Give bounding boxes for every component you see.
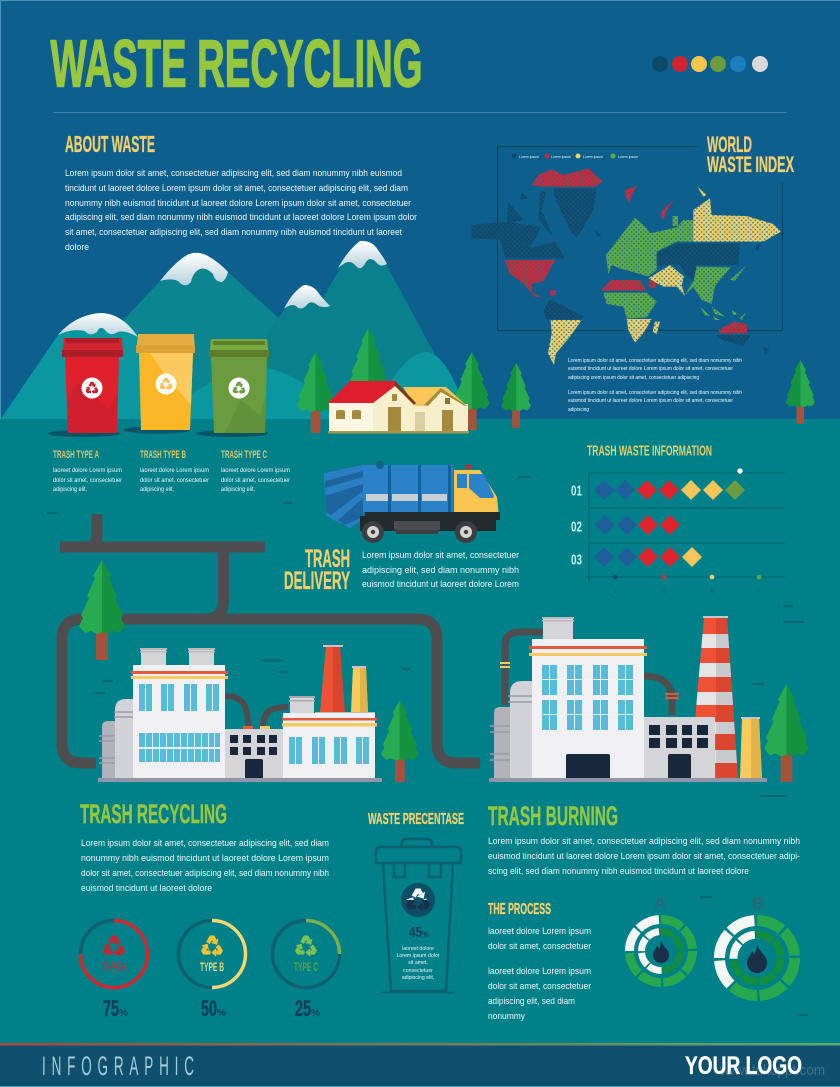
text block: map notes: euismod tincidunt ut laoreet dolore Lorem ipsum dolor sit amet, consectetuer bbox=[568, 366, 733, 372]
bin: waste percentage: 45 bbox=[409, 924, 422, 941]
donut: type A 75%: 75 bbox=[103, 996, 119, 1021]
donut: type A 75%: % bbox=[119, 1008, 128, 1019]
heading: trash delivery bbox=[284, 545, 350, 595]
pipeline bbox=[60, 514, 480, 763]
heading: trash delivery: TRASH bbox=[305, 545, 350, 573]
labels: trash type A: laoreet dolore Lorem ipsum bbox=[53, 467, 122, 474]
text block: map notes: euismod tincidunt ut laoreet dolore Lorem ipsum dolor sit amet, consectetuer bbox=[568, 398, 733, 404]
bin: waste percentage: sit amet, bbox=[408, 960, 428, 966]
text block: the process: laoreet dolore Lorem ipsum bbox=[488, 926, 591, 936]
text block: trash recycling: euismod tincidunt ut laoreet dolore bbox=[81, 883, 212, 893]
map legend: Lorem ipsum bbox=[519, 154, 540, 159]
trees: village bbox=[297, 328, 815, 433]
ring chart B bbox=[704, 894, 810, 1011]
ring chart A: A bbox=[654, 894, 666, 913]
text block: the process: laoreet dolore Lorem ipsum bbox=[488, 966, 591, 976]
bin: trash type A bbox=[48, 338, 123, 437]
labels: trash type A: TRASH TYPE A bbox=[53, 449, 99, 461]
bin: trash type B bbox=[123, 334, 195, 434]
diamond chart: 01 bbox=[571, 482, 582, 500]
heading: trash recycling: TRASH RECYCLING bbox=[80, 799, 227, 829]
text block: the process bbox=[488, 926, 591, 1021]
tree: by pipeline bbox=[79, 560, 125, 660]
text block: trash recycling: dolor sit amet, consectetuer adipiscing elit, sed diam nonummy nibh bbox=[81, 868, 329, 878]
diamond chart: 1 bbox=[613, 589, 617, 595]
text block: the process: adipiscing elit, sed diam bbox=[488, 996, 575, 1006]
text block: the process: dolor sit amet, consectetuer bbox=[488, 941, 591, 951]
text block: trash recycling: Lorem ipsum dolor sit amet, consectetuer adipiscing elit, sed diam bbox=[81, 838, 329, 848]
labels: trash type A: dolor sit amet, consectetuer bbox=[53, 477, 123, 484]
text block: map notes: adipiscing bbox=[568, 407, 589, 413]
world map frame bbox=[498, 146, 782, 330]
bin: waste percentage bbox=[376, 839, 461, 992]
bin: trash type C bbox=[196, 339, 269, 437]
bin: waste percentage: consectetuer bbox=[403, 968, 433, 974]
title: WASTE RECYCLING bbox=[50, 26, 422, 102]
donut: type B 50%: 50 bbox=[201, 996, 217, 1021]
watermark: www.tukuppt.com bbox=[719, 1062, 825, 1079]
text block: trash burning bbox=[488, 836, 800, 876]
labels: trash type C: laoreet dolore Lorem ipsum bbox=[221, 467, 290, 474]
tree: by burning plant bbox=[764, 684, 809, 782]
text block: map notes: Lorem ipsum dolor sit amet, consectetuer adipiscing elit, sed diam nonummy nibh bbox=[568, 390, 742, 396]
ring chart A bbox=[630, 894, 692, 982]
labels: trash type C bbox=[221, 449, 291, 493]
bin: waste percentage: % bbox=[422, 930, 429, 939]
donut: type A 75%: TYPE A bbox=[102, 960, 126, 974]
labels: trash type B bbox=[140, 449, 210, 493]
heading: world waste index bbox=[707, 132, 794, 177]
donut: type C 25%: % bbox=[311, 1008, 320, 1019]
labels: trash type A: adipiscing elit, bbox=[53, 486, 87, 493]
bin: waste percentage: laoreet dolore bbox=[402, 946, 434, 952]
diamond chart: 3 bbox=[662, 589, 666, 595]
dotted world map bbox=[472, 168, 781, 365]
diamond chart bbox=[571, 468, 785, 595]
text block: map notes: adipiscing orem ipsum dolor sit amet, consectetuer adipiscing bbox=[568, 375, 699, 381]
donut: type C 25% bbox=[272, 920, 340, 1021]
donut: type B 50%: % bbox=[217, 1008, 226, 1019]
palette dots bbox=[652, 56, 768, 72]
text block: map notes bbox=[568, 358, 742, 413]
diamond chart: 5 bbox=[710, 589, 714, 595]
text block: map notes: Lorem ipsum dolor sit amet, consectetuer adipiscing elit, sed diam nonummy nibh bbox=[568, 358, 742, 364]
garbage truck bbox=[324, 461, 500, 543]
background: sky panel bbox=[0, 0, 840, 420]
text block: trash burning: scing elit, sed diam nonummy nibh euismod tincidunt ut laoreet dolore bbox=[488, 866, 749, 876]
donut: type C 25%: 25 bbox=[295, 996, 311, 1021]
ring chart B: B bbox=[752, 894, 764, 913]
text block: about waste: dolore bbox=[65, 242, 89, 252]
text block: about waste bbox=[65, 168, 417, 252]
labels: trash type B: dolor sit amet, consectetuer bbox=[140, 477, 210, 484]
labels: trash type B: TRASH TYPE B bbox=[140, 449, 186, 461]
background: ground panel bbox=[0, 419, 840, 1045]
donut: type B 50% bbox=[178, 920, 246, 1021]
text block: trash delivery: Lorem ipsum dolor sit amet, consectetuer bbox=[362, 550, 519, 560]
labels: trash type B: laoreet dolore Lorem ipsum bbox=[140, 467, 209, 474]
diamond chart: 02 bbox=[571, 518, 582, 536]
map legend: Lorem ipsum bbox=[618, 154, 639, 159]
labels: trash type C: TRASH TYPE C bbox=[221, 449, 267, 461]
labels: trash type B: adipiscing elit, bbox=[140, 486, 174, 493]
diamond chart: 7 bbox=[757, 589, 761, 595]
text block: about waste: sit amet, consectetuer adipiscing elit, sed diam nonummy nibh euismod tincidunt ut laoreet bbox=[65, 227, 402, 237]
text block: trash delivery: adipiscing elit, sed diam nonummy nibh bbox=[362, 565, 519, 575]
bin: waste percentage: adipiscing elit, bbox=[402, 975, 434, 981]
text block: trash recycling bbox=[81, 838, 329, 893]
text block: about waste: Lorem ipsum dolor sit amet, consectetuer adipiscing elit, sed diam nonummy nibh euismod bbox=[65, 168, 402, 178]
text block: trash delivery bbox=[362, 550, 519, 589]
text block: trash burning: euismod tincidunt ut laoreet dolore Lorem ipsum dolor sit amet, consectetuer adipi- bbox=[488, 851, 800, 861]
heading: trash waste information: TRASH WASTE INFORMATION bbox=[587, 442, 712, 460]
heading: waste precentase: WASTE PRECENTASE bbox=[368, 811, 464, 828]
bin: waste percentage: Lorem ipsum dolor bbox=[397, 953, 440, 959]
heading: trash burning: TRASH BURNING bbox=[488, 801, 618, 831]
heading: world waste index: WORLD bbox=[707, 132, 752, 157]
text block: the process: nonummy bbox=[488, 1011, 525, 1021]
labels: trash type A bbox=[53, 449, 123, 493]
donut: type C 25%: TYPE C bbox=[294, 960, 318, 974]
heading: the process: THE PROCESS bbox=[488, 901, 551, 918]
text block: trash recycling: nonummy nibh euismod tincidunt ut laoreet dolore Lorem ipsum bbox=[81, 853, 329, 863]
map legend: Lorem ipsum bbox=[551, 154, 572, 159]
text block: about waste: nonummy nibh euismod tincidunt ut laoreet dolore Lorem ipsum dolor sit amet, consectetuer bbox=[65, 198, 411, 208]
logo: YOUR LOGO bbox=[685, 1052, 802, 1080]
factory: burning plant bbox=[489, 616, 767, 782]
diamond chart: 03 bbox=[571, 552, 582, 568]
text block: trash burning: Lorem ipsum dolor sit amet, consectetuer adipiscing elit, sed diam nonummy nibh bbox=[488, 836, 800, 846]
text block: about waste: tincidunt ut laoreet dolore Lorem ipsum dolor sit amet, consectetuer adipiscing elit, sed diam bbox=[65, 183, 408, 193]
labels: trash type C: adipiscing elit, bbox=[221, 486, 255, 493]
text block: the process: dolor sit amet, consectetuer bbox=[488, 981, 591, 991]
footer label: INFOGRAPHIC bbox=[42, 1051, 194, 1081]
heading: about waste: ABOUT WASTE bbox=[65, 131, 155, 157]
mountains bbox=[0, 241, 470, 420]
donut: type A 75% bbox=[80, 920, 148, 1021]
labels: trash type C: dolor sit amet, consectetuer bbox=[221, 477, 291, 484]
tree: by recycling plant bbox=[381, 700, 419, 782]
factory: recycling plant bbox=[98, 645, 382, 782]
text block: trash delivery: euismod tincidunt ut laoreet dolore Lorem bbox=[362, 579, 519, 589]
heading: trash delivery: DELIVERY bbox=[284, 567, 350, 595]
houses bbox=[328, 381, 469, 434]
map legend bbox=[512, 154, 639, 159]
donut: type B 50%: TYPE B bbox=[200, 960, 224, 974]
footer bar bbox=[0, 1043, 840, 1087]
text block: about waste: adipiscing elit, sed diam nonummy nibh euismod tincidunt ut laoreet dolore Lorem ipsum dolor bbox=[65, 212, 417, 222]
map legend: Lorem ipsum bbox=[583, 154, 604, 159]
